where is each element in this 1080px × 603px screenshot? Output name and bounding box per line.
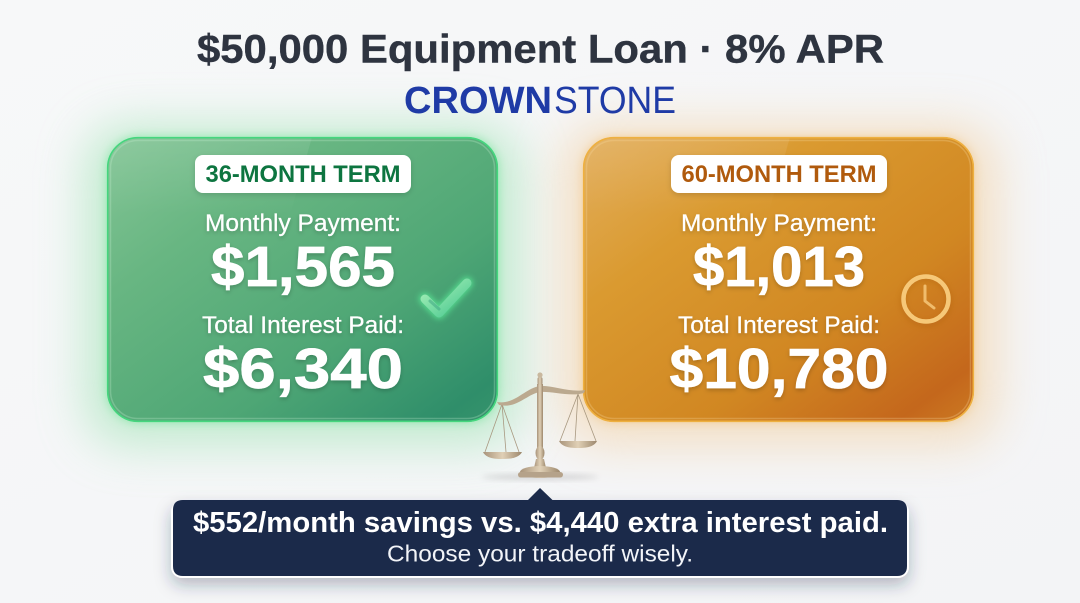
term badge: 36-MONTH TERM xyxy=(206,161,400,188)
monthly payment label: Monthly Payment: xyxy=(681,210,877,237)
total interest value: $6,340 xyxy=(203,337,403,401)
monthly payment value: $1,013 xyxy=(693,235,865,299)
callout xyxy=(171,488,909,578)
monthly payment value: $1,565 xyxy=(211,235,395,299)
total interest label: Total Interest Paid: xyxy=(202,312,404,339)
monthly payment label: Monthly Payment: xyxy=(205,210,401,237)
title: $50,000 Equipment Loan · 8% APR xyxy=(197,28,884,72)
callout subline: Choose your tradeoff wisely. xyxy=(387,540,693,566)
term badge xyxy=(195,155,411,193)
brand wordmark: Crownstone xyxy=(404,80,676,122)
total interest label: Total Interest Paid: xyxy=(678,312,880,339)
icon: check mark xyxy=(425,283,467,313)
total interest value: $10,780 xyxy=(670,337,888,401)
brand wordmark: Crownstone: CROWN xyxy=(404,80,552,122)
panel: 60-month term xyxy=(583,137,974,422)
icon: balance scale xyxy=(482,372,598,480)
callout headline: $552/month savings vs. $4,440 extra interest paid. xyxy=(193,507,888,539)
panel: 36-month term xyxy=(107,137,498,422)
brand wordmark: Crownstone: STONE xyxy=(554,80,676,122)
icon: clock xyxy=(903,276,949,324)
term badge xyxy=(671,155,887,193)
term badge: 60-MONTH TERM xyxy=(682,161,876,188)
